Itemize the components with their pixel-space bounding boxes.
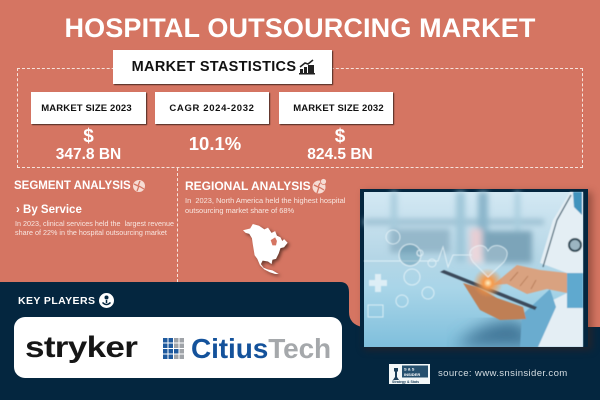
source block xyxy=(389,364,568,384)
value: 347.8 BN xyxy=(56,146,121,163)
heading: market statistics: MARKET STASTISTICS xyxy=(132,59,296,75)
label xyxy=(31,92,146,124)
heading: key players: KEY PLAYERS xyxy=(18,295,95,307)
logo: SNS Insider: Strategy & Stats xyxy=(392,380,419,384)
source text: source: www.snsinsider.com xyxy=(438,368,568,379)
subheading: › By Service xyxy=(16,204,82,216)
logo: SNS Insider xyxy=(389,364,430,384)
photo: doctor with tablet xyxy=(360,188,596,352)
icon: globe xyxy=(133,180,145,192)
label: MARKET SIZE 2032 xyxy=(293,102,384,114)
heading: REGIONAL ANALYSIS xyxy=(185,179,311,193)
icon: grid xyxy=(163,338,184,359)
wordmark: CitiusTech xyxy=(191,333,331,364)
value xyxy=(307,126,373,163)
heading: market statistics xyxy=(113,50,332,84)
label xyxy=(279,92,393,124)
heading: key players xyxy=(18,293,114,308)
logo: SNS Insider: INSIDER xyxy=(404,372,420,377)
icon: key player badge xyxy=(99,293,114,308)
stat card: market size 2032 xyxy=(279,92,395,163)
panel: logos xyxy=(14,317,342,378)
stat card: market size 2023 xyxy=(31,92,148,163)
panel: regional analysis xyxy=(185,178,345,278)
text: outsourcing market share of 68% xyxy=(185,206,294,215)
label: CAGR 2024-2032 xyxy=(169,102,255,114)
map: North America xyxy=(243,224,291,278)
heading: SEGMENT ANALYSIS xyxy=(14,180,131,192)
text xyxy=(185,196,345,215)
title: HOSPITAL OUTSOURCING MARKET xyxy=(64,13,536,43)
value: 824.5 BN xyxy=(307,146,373,163)
logo: SNS Insider: S & S xyxy=(404,366,415,372)
divider between segment and regional xyxy=(177,168,178,282)
panel: key players background xyxy=(0,282,600,400)
label: MARKET SIZE 2023 xyxy=(41,102,132,114)
text: In 2023, North America held the highest hospital xyxy=(185,196,345,205)
logo: CitiusTech xyxy=(163,333,331,364)
text: In 2023, clinical services held the largest revenue xyxy=(15,219,174,228)
icon: chart xyxy=(299,59,315,74)
icon: globe pin xyxy=(312,178,326,194)
stat card: CAGR xyxy=(155,92,271,154)
label xyxy=(155,92,269,124)
value: 10.1% xyxy=(189,133,241,154)
text: share of 22% in the hospital outsourcing market xyxy=(15,228,167,236)
logo: stryker: stryker xyxy=(25,331,137,364)
panel: segment analysis xyxy=(14,180,174,236)
value: $ xyxy=(335,126,345,147)
value xyxy=(56,126,121,163)
panel: market statistics dashed frame xyxy=(17,68,583,168)
value: $ xyxy=(83,126,94,147)
text xyxy=(15,219,174,236)
